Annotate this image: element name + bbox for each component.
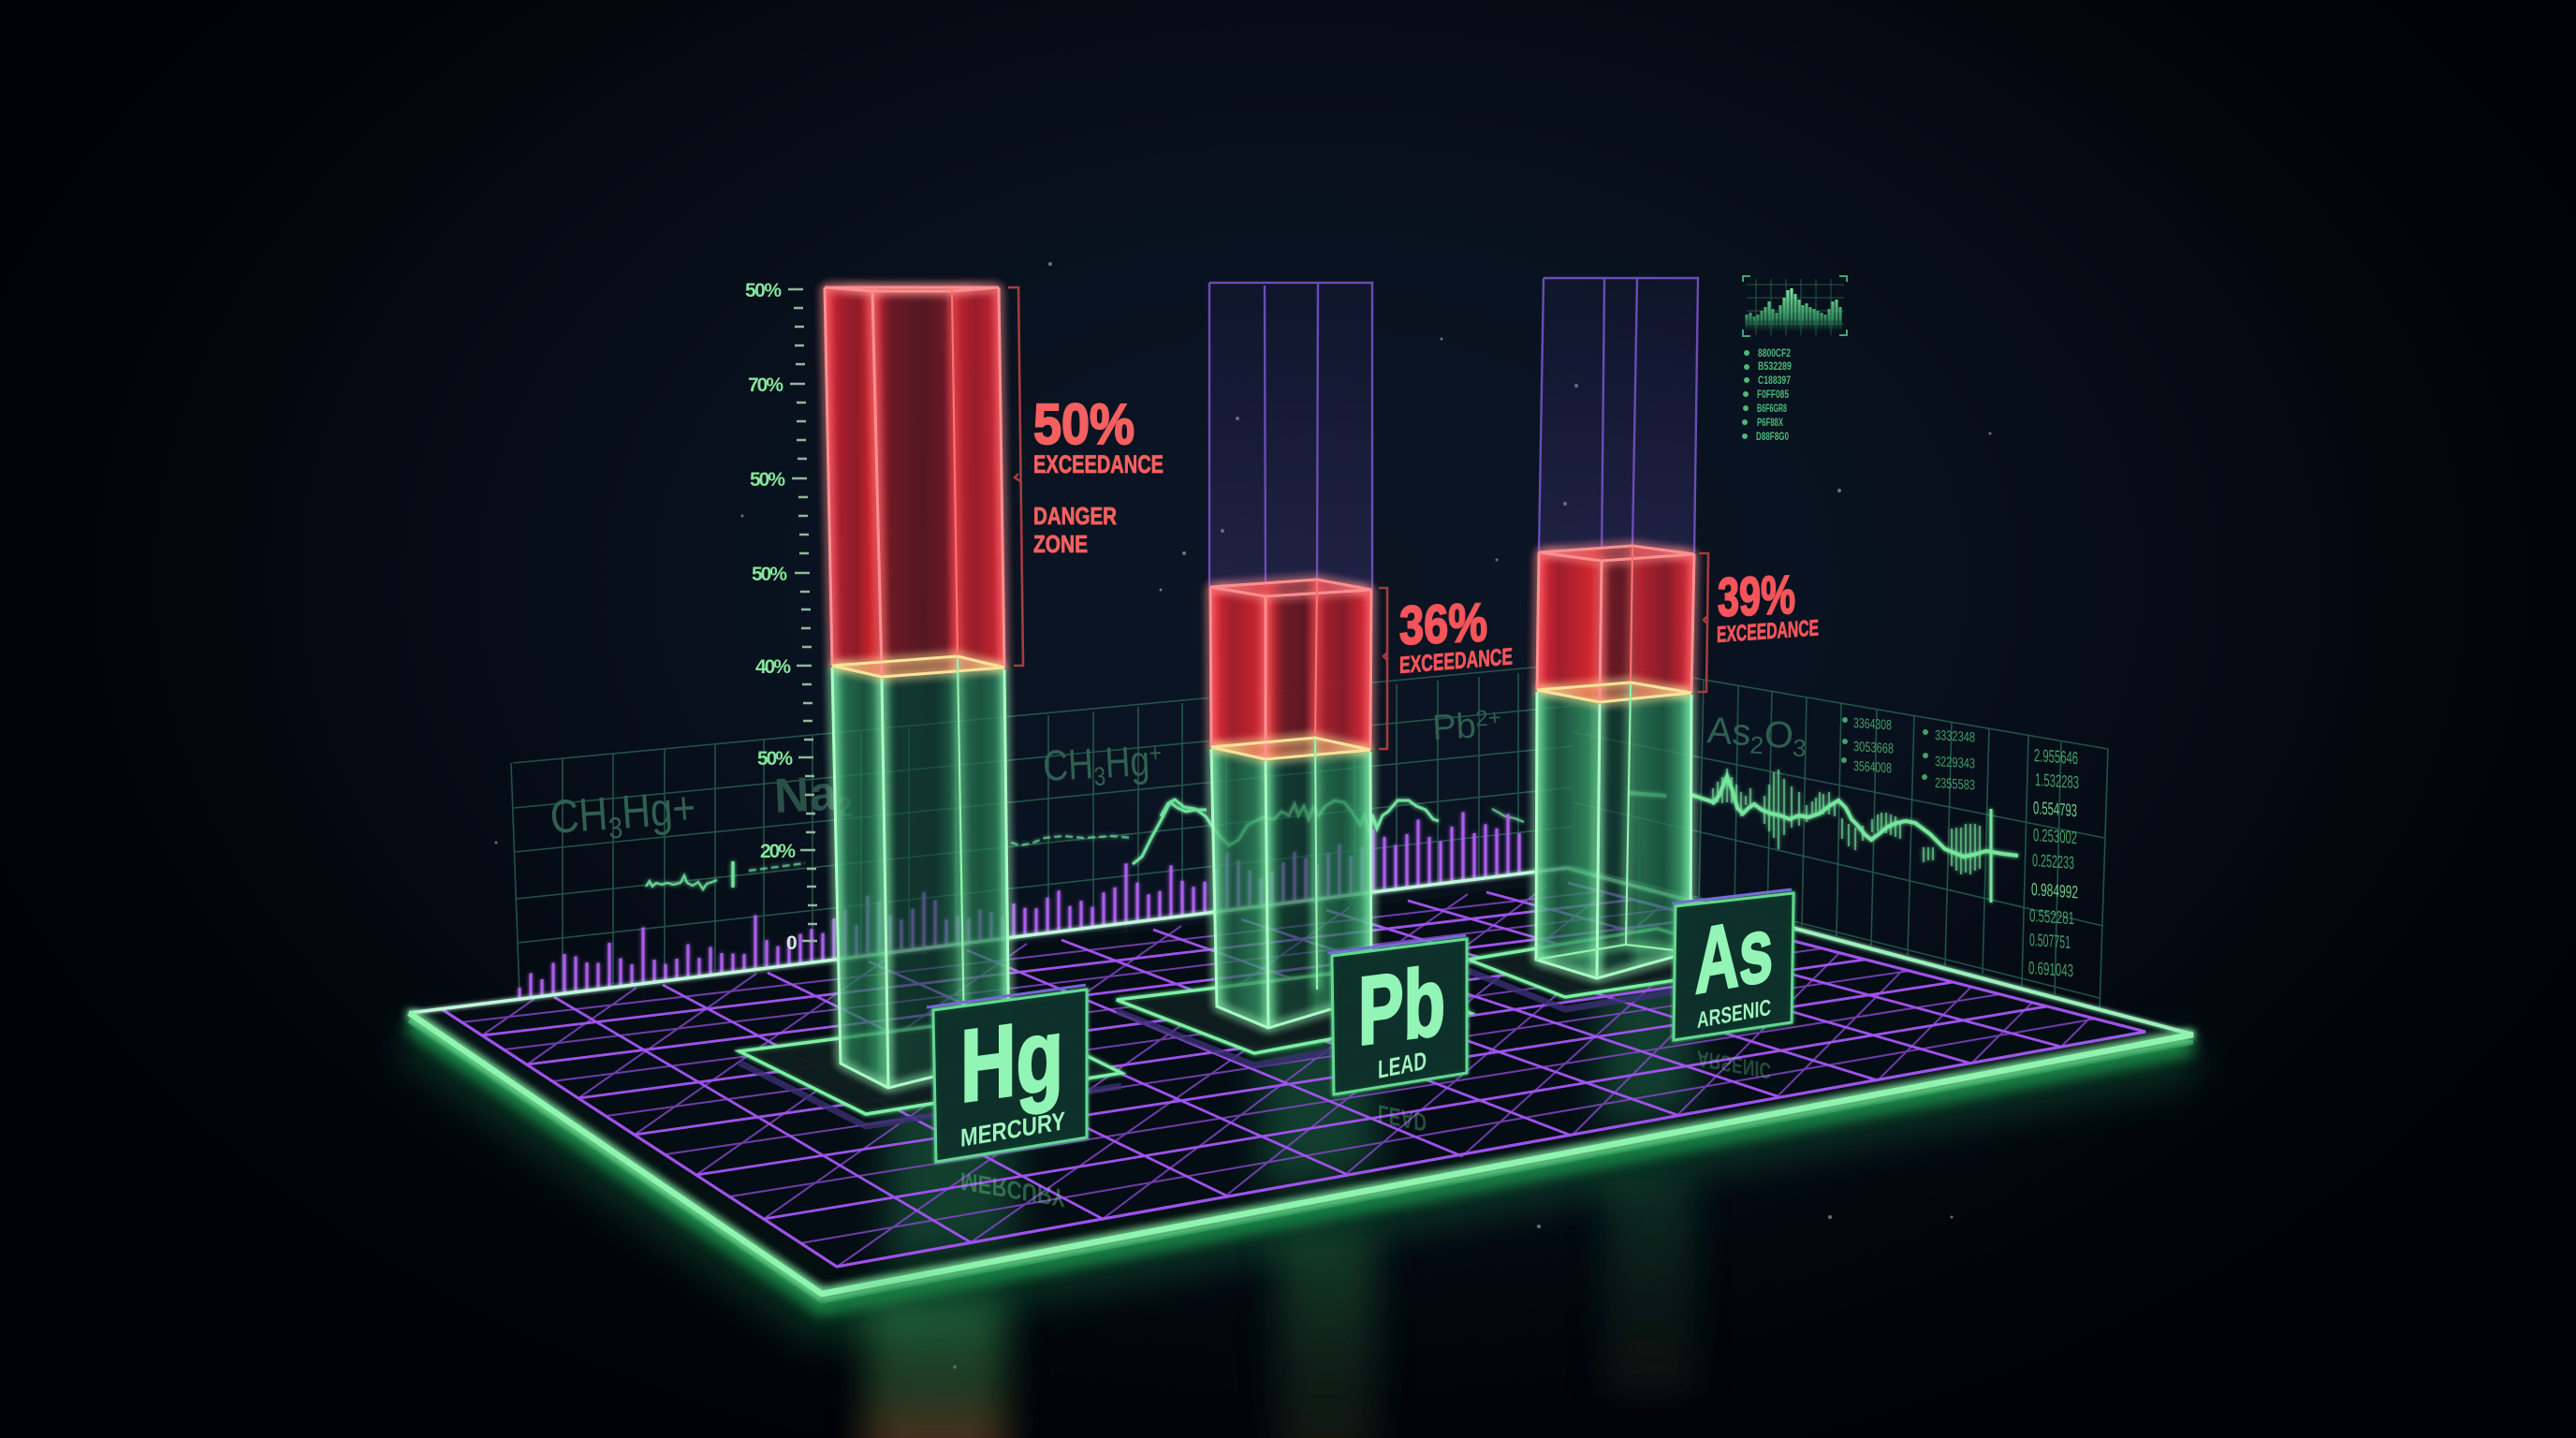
element card: mercury: Hg	[960, 997, 1063, 1124]
wall formula labels: As	[1705, 710, 1752, 754]
wall formula labels: CH	[1042, 739, 1094, 790]
element card: lead: Pb	[1358, 946, 1445, 1065]
element card: arsenic: ARSENIC	[1697, 1045, 1771, 1083]
floor grid: main lines	[442, 883, 2145, 1267]
callout: mercury exceedance: ZONE	[1033, 530, 1088, 558]
axis labels: 0	[786, 932, 798, 954]
green trace: right wall	[1629, 769, 2018, 902]
element card: arsenic: As	[1695, 897, 1773, 1013]
numbers column far right: 0.252233	[2032, 851, 2074, 873]
numbers column far right: 0.253002	[2033, 826, 2077, 848]
numbers columns middle: 3229343	[1935, 754, 1975, 772]
element card: mercury: MERCURY	[960, 1106, 1065, 1152]
numbers column far right: 2.955646	[2034, 746, 2078, 769]
wall formula labels: 3	[1093, 762, 1106, 792]
axis labels: 50%	[750, 469, 785, 491]
mini chart legend list: F0FF085	[1757, 388, 1789, 401]
ghost limit column	[1209, 283, 1372, 590]
mini chart legend list: 8800CF2	[1758, 346, 1791, 360]
callout: mercury exceedance: EXCEEDANCE	[1033, 450, 1164, 478]
mini chart legend list	[1742, 346, 1792, 443]
wall formula labels: +	[1149, 739, 1163, 769]
numbers columns middle: 3053668	[1853, 739, 1894, 757]
callout: lead exceedance: EXCEEDANCE	[1399, 643, 1513, 679]
purple spectrum bars on back wall	[520, 805, 1519, 1023]
back wall right: data grid	[1573, 657, 2108, 1011]
wall formula labels: 2	[836, 792, 854, 823]
wall formula labels: Hg	[1104, 736, 1150, 786]
numbers column far right: 0.554793	[2033, 799, 2077, 821]
floor reflections	[885, 952, 1696, 1269]
platform	[409, 868, 2193, 1322]
mini chart legend list: D88F8G0	[1756, 430, 1789, 443]
element card: mercury: MERCURY	[960, 1167, 1065, 1213]
reflection below platform	[866, 1180, 1694, 1438]
red segment	[1537, 546, 1694, 702]
mini chart: top right	[1743, 276, 1847, 336]
wall formula labels: Na	[773, 767, 838, 824]
wall formula labels: 3	[1792, 733, 1808, 762]
platform front edges	[409, 1013, 2193, 1294]
red danger segment	[825, 287, 1004, 677]
numbers column far right: 1.532283	[2035, 770, 2079, 793]
green safe segment	[832, 666, 1009, 1088]
callout: lead exceedance: 36%	[1399, 592, 1487, 656]
wall formula labels: 3	[607, 812, 624, 845]
axis labels: 40%	[755, 656, 791, 678]
numbers columns middle: 3332348	[1935, 727, 1975, 746]
axis labels: 20%	[760, 841, 796, 862]
numbers column far right: 0.507751	[2029, 931, 2071, 953]
numbers columns middle	[1841, 715, 1975, 794]
floor grid: diagonals	[461, 886, 2097, 1267]
element card: lead	[1327, 935, 1467, 1137]
wall formula labels	[549, 705, 1808, 850]
wall data tables	[1841, 715, 2079, 981]
wall formula labels: Pb	[1431, 707, 1477, 748]
particles	[494, 262, 1992, 1369]
y axis scale	[745, 280, 817, 954]
numbers columns middle: 3364308	[1853, 715, 1892, 733]
axis labels	[745, 280, 798, 954]
red segment	[1210, 580, 1371, 759]
mini chart legend list: C188397	[1758, 374, 1791, 387]
callout: mercury exceedance: 50%	[1033, 392, 1134, 456]
wall formula labels: CH	[549, 787, 609, 844]
wall formula labels: Hg+	[620, 781, 697, 838]
ghost limit column	[1539, 276, 1698, 554]
numbers column far right: 0.552281	[2029, 906, 2074, 929]
bar: mercury	[825, 287, 1009, 1088]
axis labels: 50%	[752, 564, 787, 585]
callout: mercury exceedance: DANGER	[1033, 502, 1117, 530]
wall formula labels: 2+	[1475, 705, 1501, 732]
base pads	[739, 929, 1778, 1126]
axis ticks	[788, 289, 817, 941]
callout: arsenic exceedance	[1697, 553, 1819, 692]
mini chart legend list: B6F6GR8	[1757, 402, 1787, 415]
element card: lead: LEAD	[1378, 1046, 1427, 1084]
bar: lead	[1209, 283, 1372, 1028]
element card: arsenic	[1672, 889, 1793, 1083]
wall formula labels: 2	[1749, 730, 1764, 759]
green segment	[1211, 747, 1371, 1028]
element card: lead: LEAD	[1378, 1099, 1427, 1137]
wall formula labels: O	[1763, 713, 1794, 756]
callout: arsenic exceedance: 39%	[1718, 565, 1795, 628]
pad: mercury	[739, 1017, 1121, 1114]
axis labels: 50%	[757, 748, 793, 770]
axis labels: 50%	[745, 280, 782, 301]
back wall left: data grid	[511, 664, 1573, 995]
platform side glow	[409, 1035, 2193, 1322]
element card: mercury	[927, 985, 1087, 1213]
axis labels: 70%	[748, 374, 783, 396]
mini chart legend list: B532289	[1758, 360, 1792, 373]
numbers column far right: 0.691043	[2028, 959, 2073, 981]
green segment	[1536, 690, 1691, 978]
numbers column far right: 0.984992	[2031, 880, 2078, 902]
numbers columns middle: 3564008	[1853, 758, 1892, 776]
platform surface	[409, 868, 2193, 1294]
platform back edge	[409, 868, 1567, 1013]
green trace: left wall	[646, 800, 1524, 889]
callout: lead exceedance	[1379, 588, 1513, 749]
mini chart legend list: P6F88X	[1757, 416, 1783, 429]
numbers column far right	[2028, 746, 2079, 981]
bar: arsenic	[1536, 276, 1698, 978]
pad: lead	[1117, 972, 1470, 1053]
callout: arsenic exceedance: EXCEEDANCE	[1717, 615, 1819, 648]
callout: mercury exceedance	[1008, 287, 1164, 666]
numbers columns middle: 2355583	[1935, 775, 1975, 794]
pad: arsenic	[1469, 929, 1778, 997]
element card: arsenic: ARSENIC	[1697, 995, 1771, 1034]
